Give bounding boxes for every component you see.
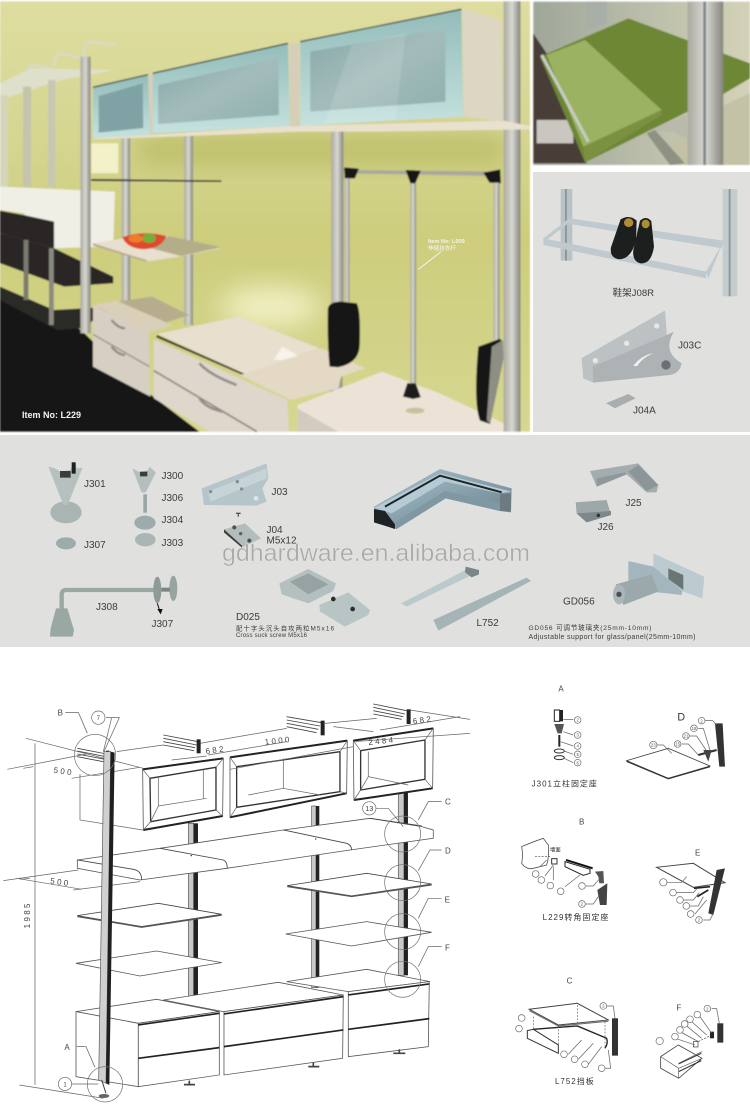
- callout arrow: [418, 252, 441, 269]
- shelf right upper: [287, 873, 432, 896]
- drawer unit middle: [163, 982, 343, 1075]
- dimension: 682 left: 682: [205, 744, 226, 756]
- part J25: [590, 463, 658, 492]
- shelf left upper: [77, 903, 222, 927]
- callout text L009: Item No: L009: [428, 239, 465, 245]
- detail A: 4: [576, 744, 579, 749]
- wall shadow under cabinets: [135, 135, 507, 165]
- label: GD056: [563, 596, 595, 608]
- callout number 13: [363, 802, 376, 815]
- detail C: C: [567, 977, 573, 986]
- dimension: 1000: 1000: [264, 735, 292, 747]
- dimension: height 1985: 1985: [23, 901, 32, 928]
- label: 鞋架J08R: [612, 287, 654, 299]
- cabinet 2: [153, 43, 290, 133]
- label: J03: [272, 487, 288, 498]
- caption C: L752挡板: [555, 1076, 595, 1086]
- photo: wardrobe system L229: [0, 1, 530, 432]
- detail A: [554, 684, 581, 766]
- detail A: 2: [576, 718, 579, 723]
- bracket: [647, 115, 687, 138]
- label: Adjustable support for glass/panel(25mm-10mm): [528, 634, 696, 641]
- detail F: [656, 1003, 723, 1078]
- posts: [561, 189, 572, 261]
- post: [688, 2, 723, 165]
- photo: green shelf detail: [533, 2, 750, 165]
- part J301: [48, 462, 83, 523]
- cabinet 3: [300, 9, 463, 126]
- part J307: [56, 537, 76, 549]
- callout A: A: [64, 1043, 70, 1052]
- label: J04: [266, 525, 283, 536]
- label: J300: [162, 471, 184, 482]
- fruit bowl: [122, 233, 166, 249]
- part D025: [279, 569, 370, 627]
- post 2: [188, 823, 198, 1005]
- wall brackets top: [163, 704, 411, 753]
- label: J307: [84, 540, 106, 551]
- left drawers: [93, 301, 172, 333]
- drawer unit right: [287, 969, 430, 1057]
- detail A: 3: [576, 733, 579, 738]
- plate on lower shelf: [101, 297, 189, 328]
- part J03: [202, 463, 268, 517]
- detail E: [657, 849, 725, 923]
- caption A: J301立柱固定座: [532, 779, 598, 789]
- callout text Chinese: 伸缩挂衣杆: [428, 244, 456, 252]
- rack frame: [543, 218, 724, 278]
- callout leader lines: [65, 712, 442, 1084]
- label: J04A: [633, 406, 656, 416]
- shoes: [611, 217, 654, 263]
- label: J308: [96, 602, 118, 613]
- label: Cross suck screw M5x16: [236, 633, 308, 639]
- wood shelf: [93, 236, 221, 262]
- floor and back room: [0, 287, 199, 432]
- post stub: [554, 710, 560, 721]
- detail F: F: [676, 1003, 681, 1012]
- label: J306: [162, 493, 184, 504]
- detail D: [627, 712, 725, 779]
- technical drawing: assembled wardrobe: [3, 704, 470, 1102]
- callout number 13: 13: [365, 804, 373, 813]
- part L752: [401, 567, 531, 631]
- part J26: [576, 500, 611, 522]
- cabinet left: [143, 758, 223, 830]
- green shelf: [540, 18, 750, 162]
- left shelving unit in the background: [0, 42, 117, 330]
- detail A: 6: [576, 760, 579, 765]
- label: J26: [598, 522, 614, 533]
- callout C: C: [445, 798, 451, 807]
- back glow: [91, 143, 118, 173]
- top shelf with stoppers: [77, 818, 433, 880]
- label: J307: [152, 619, 174, 630]
- photo caption: Item No: L229: [22, 410, 81, 420]
- wall bracket left: [77, 748, 109, 762]
- callout number 7: 7: [97, 716, 101, 722]
- part corner profile: [374, 469, 512, 529]
- callout number 7: [92, 711, 105, 724]
- shelf left lower: [76, 951, 222, 976]
- dimension: 500 mid: 500: [50, 876, 71, 888]
- label: L752: [476, 618, 499, 629]
- panel: shoe rack and brackets: [533, 172, 750, 432]
- detail B: [522, 818, 607, 907]
- detail D: 21: [684, 734, 689, 739]
- band background: [0, 435, 750, 647]
- callout D: D: [445, 846, 451, 855]
- detail E: 2: [698, 918, 701, 923]
- caption B: L229转角固定座: [543, 912, 609, 922]
- dimension lines: [3, 710, 470, 1098]
- detail D: D: [677, 712, 685, 724]
- J04A plate: [606, 394, 636, 408]
- part J300: [132, 467, 156, 546]
- callout B: B: [58, 708, 63, 717]
- photo background: [533, 2, 750, 165]
- detail drawings: [516, 684, 725, 1086]
- dimension: 2484: 2484: [368, 735, 396, 747]
- detail C: [516, 977, 618, 1072]
- part GD056: [613, 553, 704, 605]
- label: J304: [162, 515, 184, 526]
- callout E: E: [445, 895, 450, 904]
- detail B: B: [579, 818, 584, 827]
- detail E: E: [695, 849, 700, 858]
- label: J25: [626, 498, 642, 509]
- detail A: 5: [576, 752, 579, 757]
- wardrobe lift rail: [328, 167, 504, 424]
- J03C bracket: [582, 311, 682, 383]
- callout number 1: [58, 1077, 72, 1091]
- cabinet 1: [93, 75, 150, 138]
- label: J303: [162, 538, 184, 549]
- panel: accessories: [0, 435, 750, 647]
- detail C: 2: [602, 1004, 605, 1009]
- callout F: F: [445, 944, 450, 953]
- detail D: 2: [700, 718, 703, 723]
- cabinet middle: [230, 741, 347, 817]
- detail D: 15: [675, 742, 681, 747]
- cabinet behind box: [80, 774, 143, 830]
- watermark: gdhardware.en.alibaba.com: [222, 540, 530, 567]
- drawer unit left: [76, 999, 219, 1087]
- detail B: 墙面: [550, 845, 561, 853]
- detail B: 2: [581, 902, 584, 907]
- wall glow above tabletops: [220, 287, 321, 327]
- detail F: 2: [706, 1006, 709, 1011]
- cabinet right: [353, 728, 433, 800]
- post 3: [312, 806, 319, 988]
- letter A: A: [558, 684, 564, 693]
- detail D: 23: [651, 743, 656, 748]
- label: 配十字头沉头自攻两粒M5x16: [236, 624, 334, 632]
- callout number 1: 1: [63, 1082, 67, 1088]
- center tabletop: [157, 317, 319, 374]
- glass shelf: [91, 179, 221, 182]
- detail D: 18: [692, 726, 697, 731]
- shelf right lower: [286, 922, 432, 946]
- part J308: [50, 576, 177, 637]
- uprights: [122, 137, 130, 303]
- post 4: [398, 793, 408, 975]
- dimension: 500 top: 500: [53, 766, 74, 777]
- left column: [80, 57, 91, 333]
- cabinet underside ledge: [93, 121, 530, 139]
- label: J301: [84, 479, 106, 490]
- front left post: [99, 752, 115, 1098]
- dimension: 682 right: 682: [412, 714, 434, 726]
- shelf handle: [542, 55, 588, 142]
- panel background: [533, 172, 750, 432]
- right tabletop: [297, 372, 504, 432]
- center drawers: [154, 339, 289, 432]
- callout circles: [74, 734, 421, 1102]
- label: GD056 可调节玻璃夹(25mm-10mm): [528, 623, 652, 632]
- label: D025: [236, 612, 260, 623]
- label: J03C: [678, 340, 701, 352]
- wall: [0, 1, 530, 432]
- fixing seat: [554, 724, 564, 733]
- part J04: [224, 523, 261, 548]
- cabinet side panel: [462, 9, 504, 122]
- label: M5x12: [266, 536, 297, 546]
- overall width dimension line: [230, 733, 470, 769]
